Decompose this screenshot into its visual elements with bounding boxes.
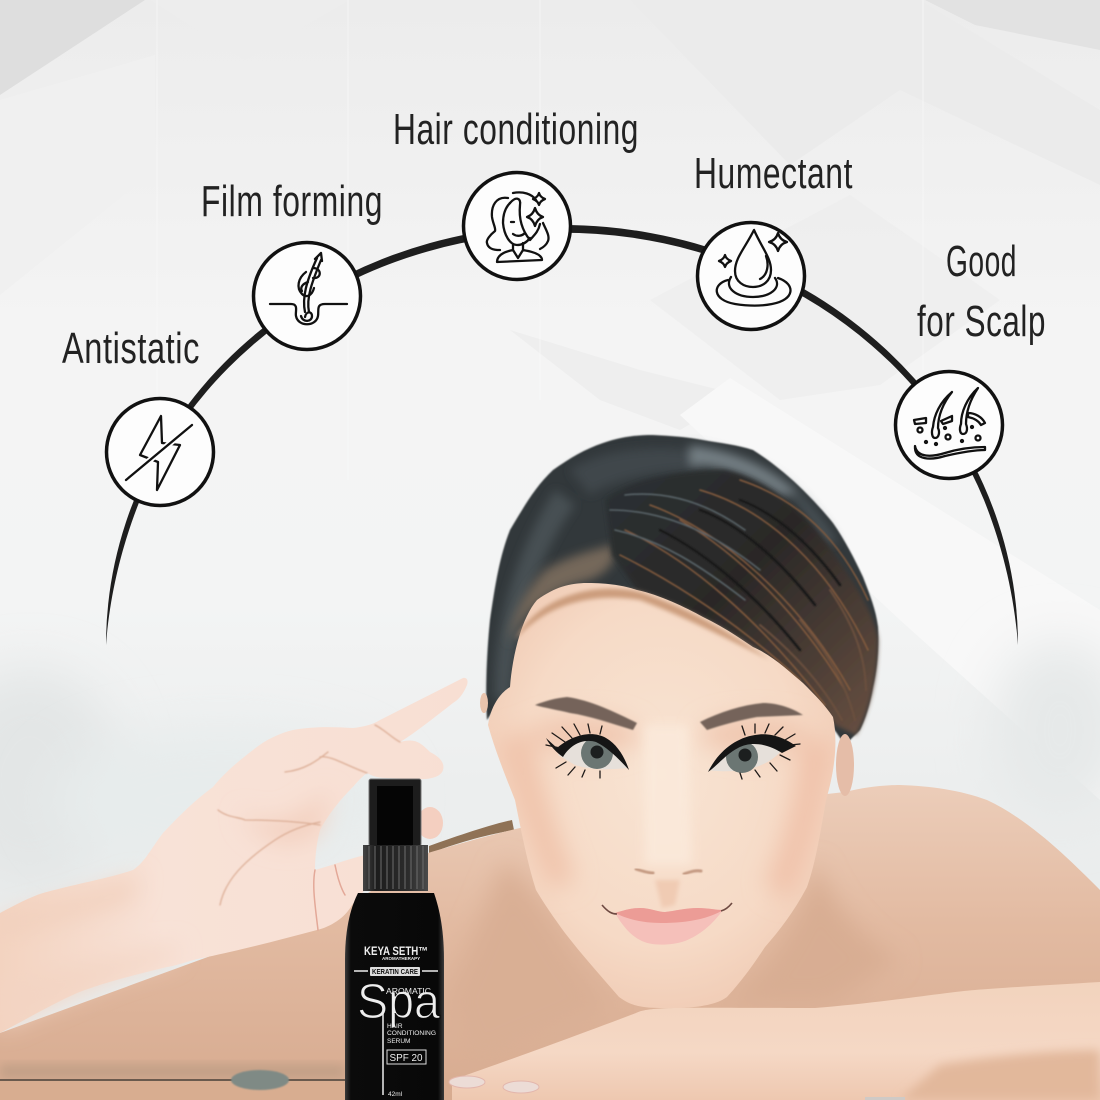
jaw and neck shadow bbox=[720, 860, 900, 1005]
face bbox=[488, 583, 835, 1008]
right eye bbox=[708, 724, 800, 779]
label: Hair conditioning bbox=[393, 105, 639, 154]
bottle cap bbox=[369, 779, 421, 846]
hair strands bbox=[610, 480, 868, 720]
forearm shade bbox=[900, 1050, 1100, 1100]
icon: coated hair follicle bbox=[270, 253, 347, 324]
label: Good bbox=[946, 237, 1017, 286]
hair tail bbox=[429, 820, 514, 854]
photo: woman bbox=[0, 435, 1100, 1100]
hand skin tones bbox=[0, 790, 330, 1028]
product bottle bbox=[345, 779, 444, 1100]
left eyebrow bbox=[535, 697, 637, 730]
benefit: Good for Scalp bbox=[896, 237, 1046, 478]
label: Film forming bbox=[201, 177, 383, 226]
arc connecting benefits bbox=[106, 225, 1018, 645]
benefit: Film forming bbox=[201, 177, 383, 350]
benefit: Antistatic bbox=[62, 324, 214, 506]
bottle label: AROMATHERAPY bbox=[382, 956, 420, 961]
forearm under chin bbox=[452, 982, 1100, 1100]
surface reflection bbox=[231, 1070, 289, 1090]
hair base bbox=[486, 435, 878, 745]
benefit: Humectant bbox=[694, 149, 853, 330]
hair lighter grey-blue crown and side bbox=[495, 445, 838, 700]
benefit: Good for Scalp: for Scalp bbox=[917, 297, 1046, 346]
bottle label bbox=[354, 946, 441, 1098]
body shadow at left of chin bbox=[445, 860, 610, 1070]
nostrils bbox=[636, 869, 701, 874]
label: Antistatic bbox=[62, 324, 200, 373]
right eyebrow bbox=[700, 703, 803, 730]
philtrum shade bbox=[655, 880, 680, 908]
left ear tip bbox=[480, 693, 488, 713]
bottle label: AROMATIC bbox=[386, 986, 431, 996]
lower body shadow bbox=[0, 1064, 345, 1079]
icon: water drop bbox=[717, 230, 790, 306]
hairline soft shadow bbox=[515, 589, 770, 660]
thumb crease bbox=[314, 865, 345, 930]
shoulder and back bbox=[0, 785, 1100, 1100]
bottle label: KERATIN CARE bbox=[372, 969, 418, 976]
ear bbox=[836, 734, 854, 796]
raised arm and hand bbox=[0, 678, 468, 1033]
bottle label: 42ml bbox=[388, 1091, 403, 1098]
finger creases bbox=[218, 725, 400, 905]
label: Humectant bbox=[694, 149, 853, 198]
left eye bbox=[546, 724, 629, 778]
bottle collar bbox=[363, 845, 428, 891]
bottle label: SERUM bbox=[387, 1038, 410, 1045]
bottle label: KEYA SETH™ bbox=[364, 946, 428, 958]
bottle label: Spa bbox=[357, 975, 441, 1029]
nails on table bbox=[449, 1076, 539, 1093]
icon: woman with shiny hair bbox=[487, 192, 549, 262]
lips bbox=[602, 903, 732, 945]
thumb tip behind bottle bbox=[417, 807, 443, 839]
parting and left hairline bbox=[508, 545, 614, 645]
fringe bbox=[605, 470, 878, 735]
benefit: Hair conditioning bbox=[393, 105, 639, 280]
icon: no static bolt bbox=[126, 416, 192, 490]
nose highlight bbox=[644, 725, 692, 865]
lashes bbox=[546, 724, 602, 778]
face contour blush bbox=[495, 717, 835, 900]
lower band bbox=[0, 1081, 345, 1100]
table glimpse bbox=[865, 1097, 905, 1100]
bottle label: HAIR bbox=[387, 1023, 403, 1030]
bottle body bbox=[345, 893, 444, 1100]
icon: scalp and follicles bbox=[914, 388, 985, 459]
table contact line bbox=[0, 1079, 345, 1081]
lashes bbox=[740, 724, 800, 779]
bottle label: CONDITIONING bbox=[387, 1030, 436, 1037]
bottle label: SPF 20 bbox=[390, 1052, 423, 1064]
